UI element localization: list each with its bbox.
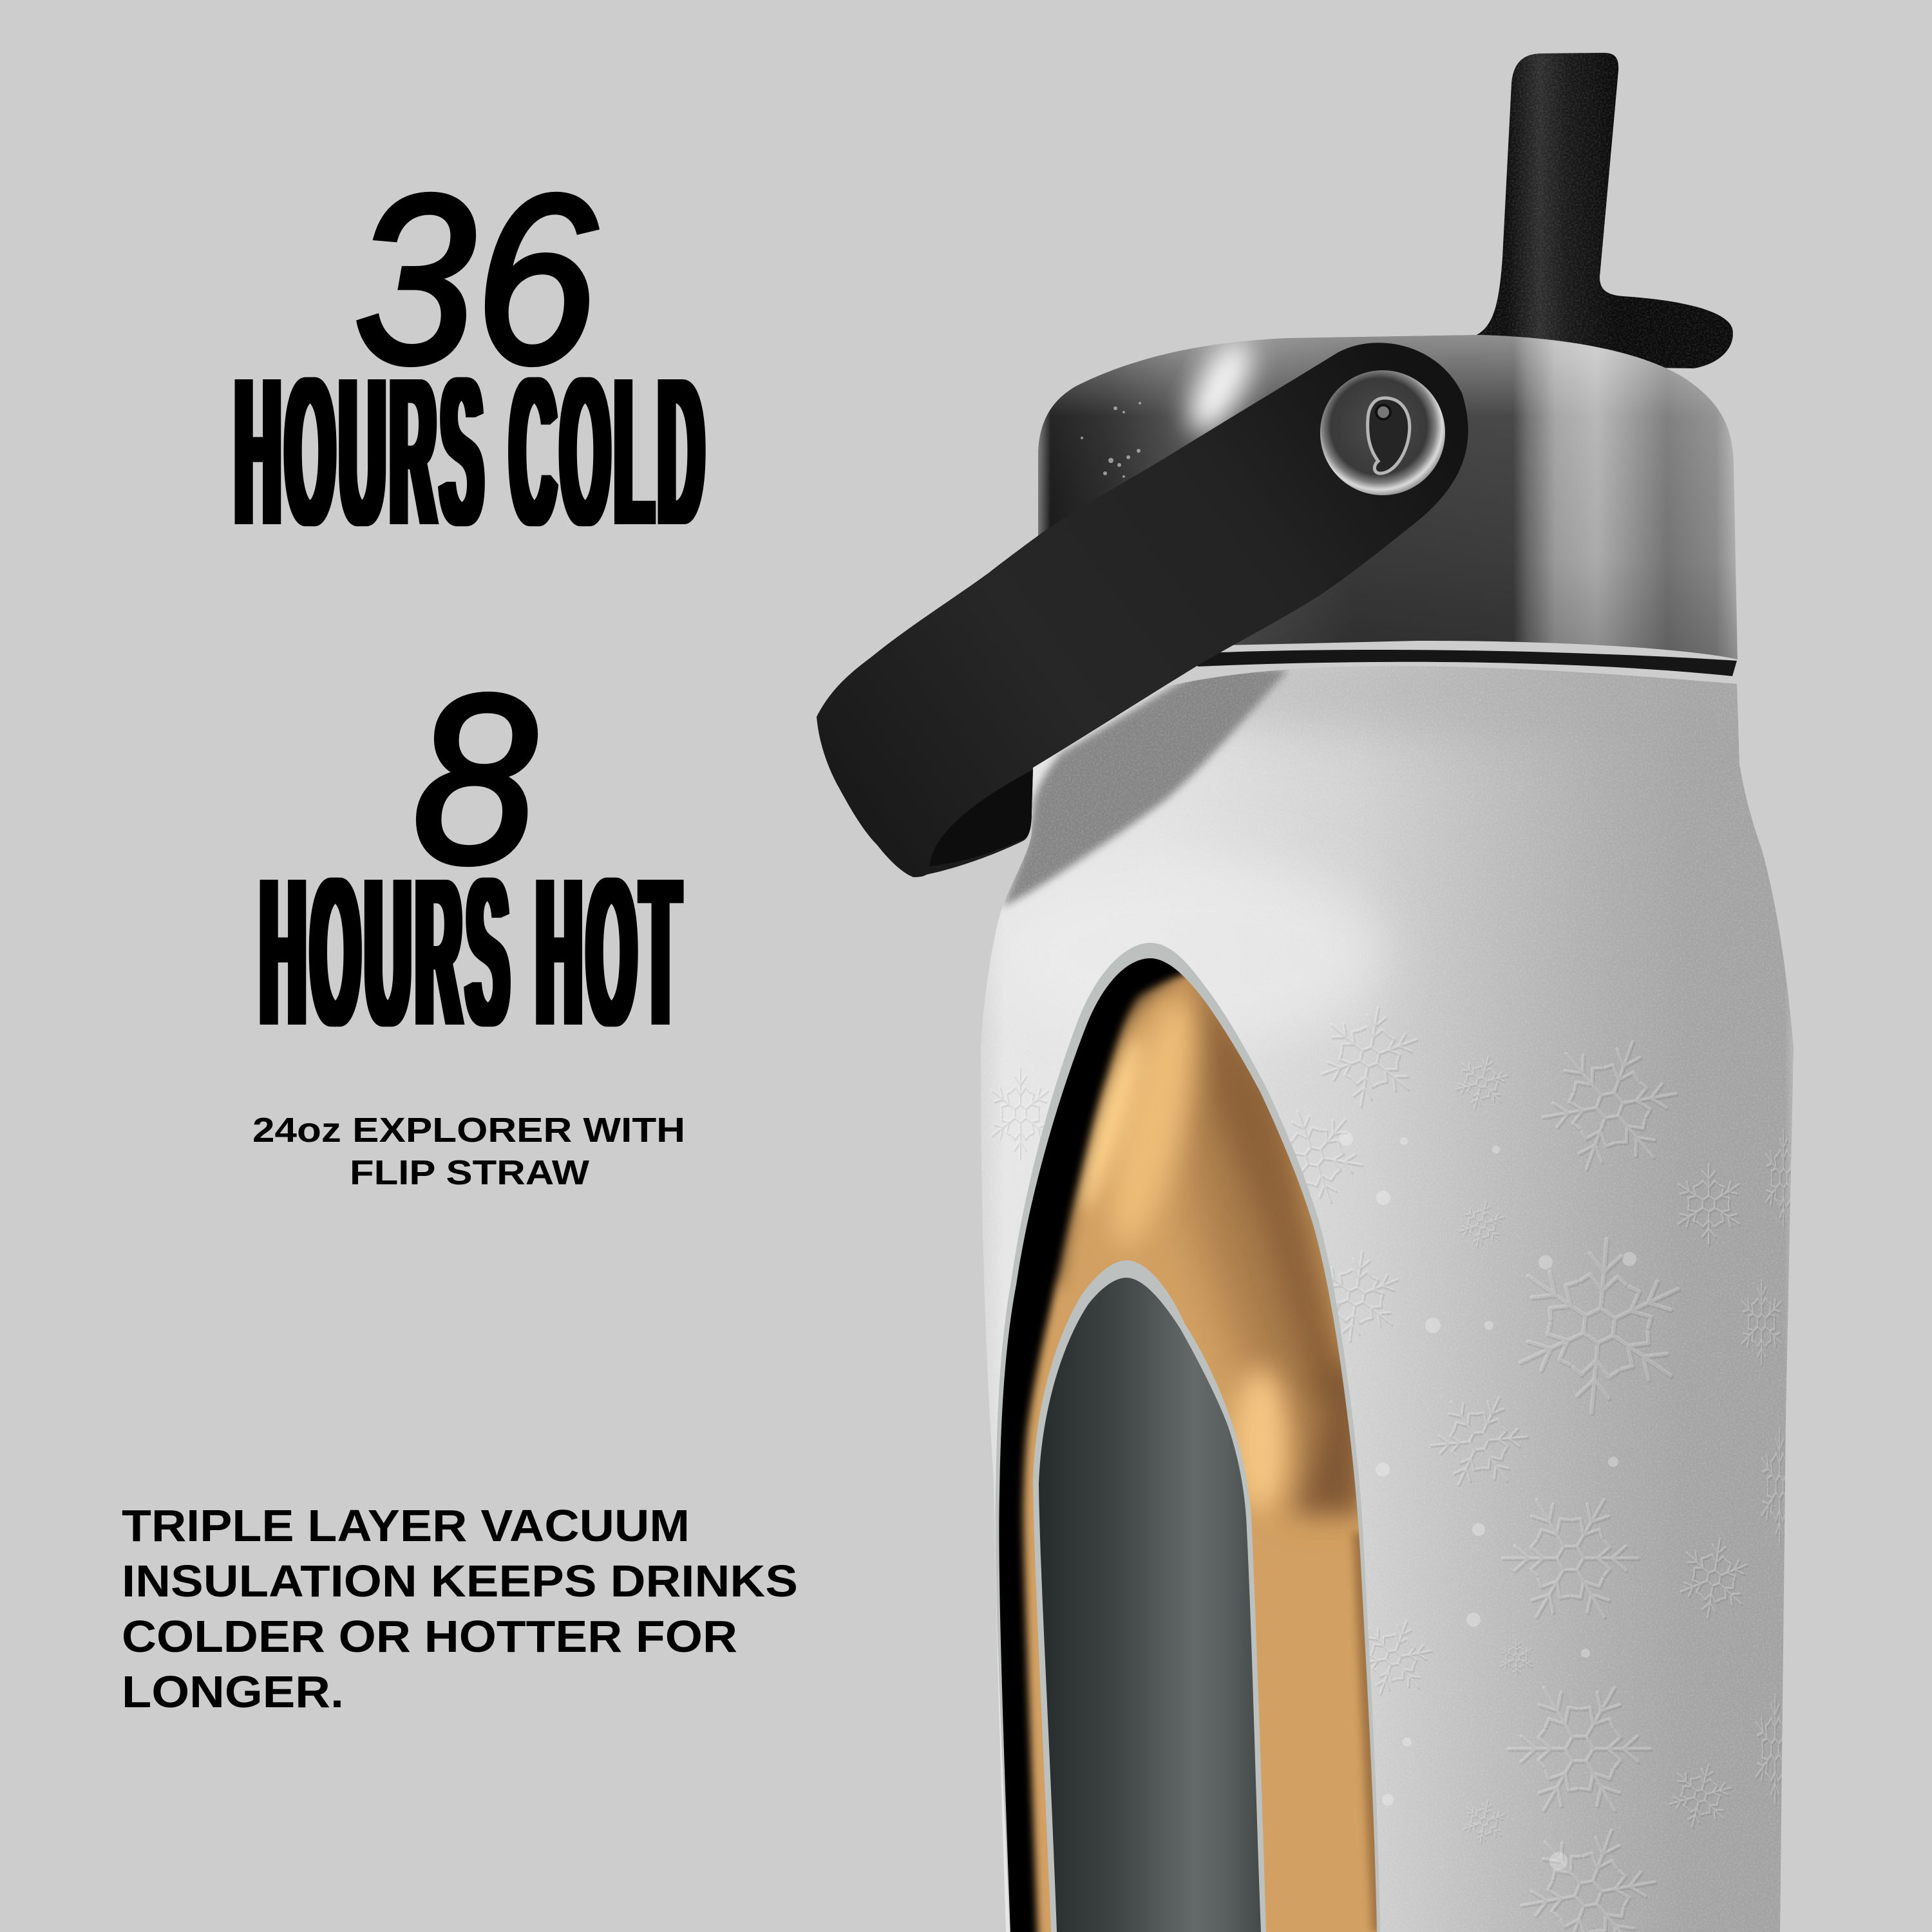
product name: 24oz EXPLORER WITH — [252, 1111, 685, 1150]
insulation description: INSULATION KEEPS DRINKS — [122, 1556, 798, 1606]
black vacuum gap — [966, 927, 1191, 1932]
copper highlights — [1094, 988, 1212, 1253]
stat: 8 hours hot — [260, 645, 680, 1070]
inner side of handle loop — [929, 770, 1033, 866]
copper layer with vacuum gap — [966, 927, 1385, 1932]
number 36: 36 — [354, 145, 598, 413]
cutaway showing triple layer insulation — [966, 927, 1385, 1932]
product name: FLIP STRAW — [350, 1153, 589, 1192]
heading: hours cold: HOURS COLD — [235, 334, 704, 569]
inner steel layer — [1039, 1278, 1261, 1932]
stat: 36 hours cold — [235, 145, 704, 569]
insulation description: COLDER OR HOTTER FOR — [122, 1611, 737, 1662]
snowflake pattern — [987, 998, 1805, 1932]
outer wall edge — [996, 943, 1380, 1932]
inner wall edge — [1033, 1260, 1266, 1932]
handle shadow on shoulder — [1002, 663, 1288, 907]
highlight on cap — [1177, 330, 1264, 442]
insulation description — [122, 1501, 798, 1717]
handle rivet with droplet logo — [1320, 370, 1445, 495]
straw — [1468, 45, 1733, 368]
heading: hours hot: HOURS HOT — [260, 835, 680, 1070]
metal cap — [1038, 335, 1738, 659]
scuff marks — [1081, 402, 1141, 478]
matte texture — [966, 644, 1816, 1932]
product name — [252, 1111, 685, 1192]
carry handle — [817, 343, 1468, 877]
snow dots — [1339, 1132, 1636, 1870]
bottle illustration — [817, 45, 1848, 1932]
number 8: 8 — [413, 645, 538, 913]
bottle body — [966, 644, 1848, 1932]
insulation description: LONGER. — [122, 1667, 344, 1717]
brown shading — [1172, 966, 1359, 1501]
gasket under cap — [1191, 650, 1737, 676]
insulation description: TRIPLE LAYER VACUUM — [122, 1501, 690, 1551]
lower right shadow — [1291, 1352, 1362, 1513]
